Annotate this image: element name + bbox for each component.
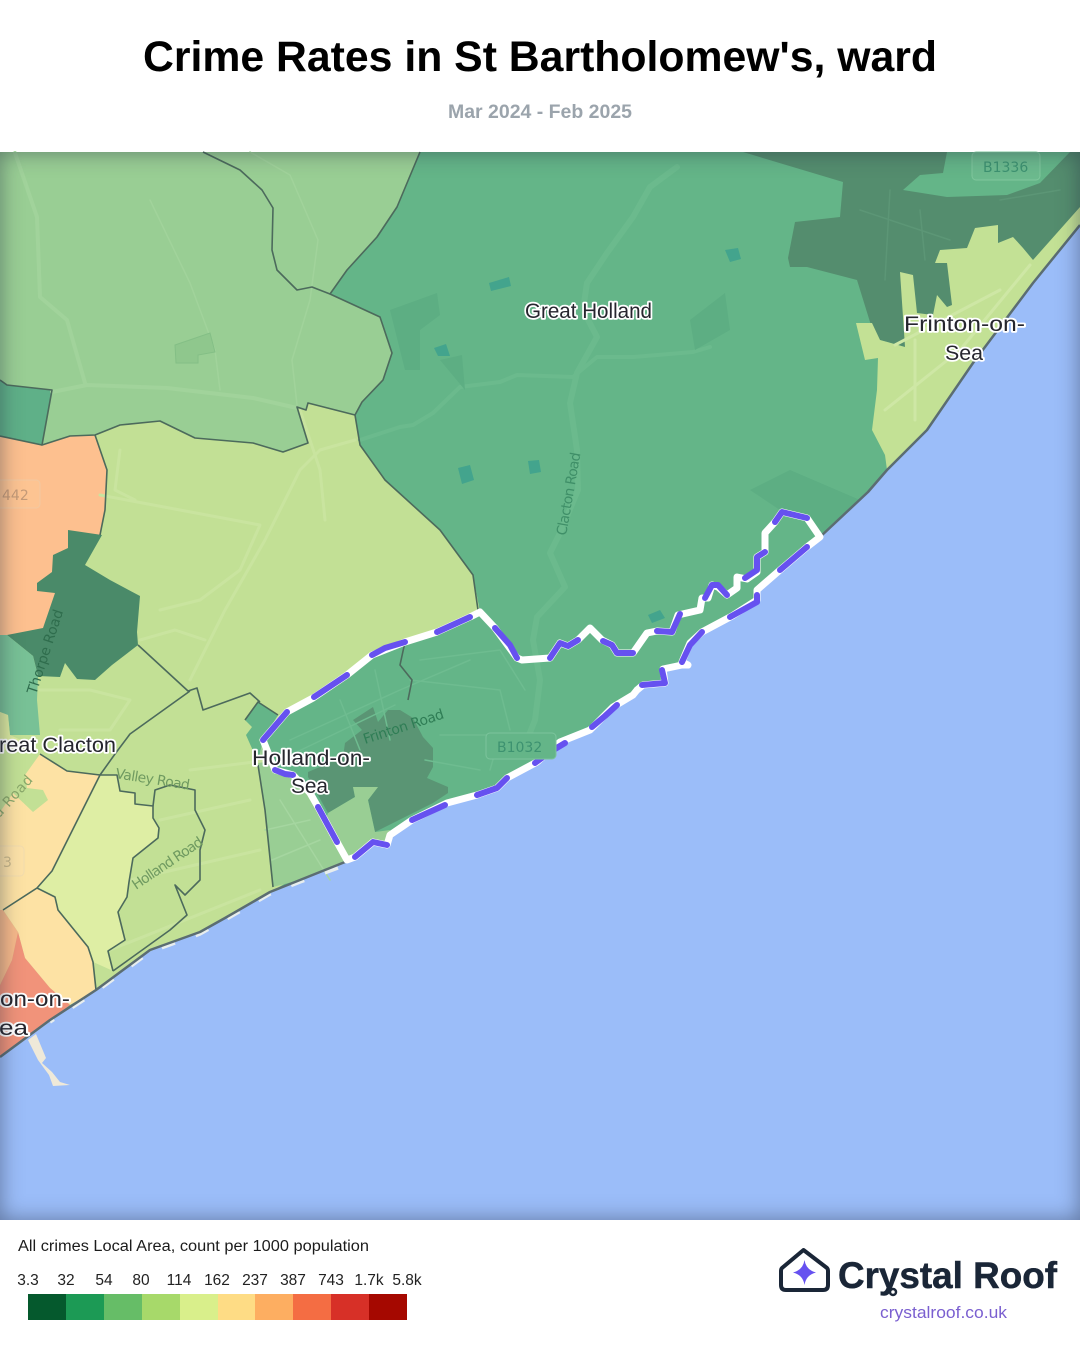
place label: Holland-on-Sea: Holland-on- xyxy=(252,747,370,770)
area: north-west light green xyxy=(0,152,420,452)
place label: Holland-on-Sea: Sea xyxy=(291,775,328,798)
icon: house with star xyxy=(781,1250,828,1290)
place label: Great Holland: Great Holland xyxy=(525,300,652,323)
wordmark knot xyxy=(890,1289,896,1295)
area: Frinton dark green xyxy=(743,152,1080,347)
area: pale yellow Clacton xyxy=(0,754,100,910)
road badge: 442 xyxy=(0,480,40,508)
legend tick labels: 162 xyxy=(204,1272,230,1289)
water bodies xyxy=(434,248,741,623)
area: pale yellow-green xyxy=(37,775,159,971)
paddock xyxy=(175,333,215,363)
pier xyxy=(28,1034,70,1086)
ward boundary: St Bartholomew's xyxy=(263,512,820,860)
road label: Holland Road: Holland Road xyxy=(129,834,206,893)
road badge: B1032 xyxy=(486,733,556,759)
legend tick labels: 114 xyxy=(167,1272,192,1289)
area: Holland light pocket xyxy=(325,787,390,862)
road badge: 442: 442 xyxy=(2,488,29,504)
area: central yellow-green xyxy=(0,403,480,1000)
area: Holland dark centre xyxy=(308,707,448,832)
coastline xyxy=(0,225,1080,1057)
area: west teal strip xyxy=(0,635,40,735)
place label: Frinton-on-Sea: Sea xyxy=(945,342,983,365)
ward outline white xyxy=(263,512,820,860)
area: Frinton light green xyxy=(856,207,1080,470)
place label: Holland-on-Sea xyxy=(252,747,370,798)
area: Holland west light green xyxy=(258,740,345,887)
area: Clacton orange xyxy=(0,435,107,635)
legend tick labels: 1.7k xyxy=(354,1272,384,1289)
website url: crystalroof.co.uk xyxy=(880,1304,1008,1322)
road: Clacton Road xyxy=(525,167,677,745)
area: pale yellow south xyxy=(3,888,96,1005)
road: Frinton streets xyxy=(885,265,1030,420)
legend title: All crimes Local Area, count per 1000 population xyxy=(18,1238,369,1255)
legend tick labels: 743 xyxy=(318,1272,344,1289)
legend tick labels: 80 xyxy=(132,1272,150,1289)
road: north-west lanes xyxy=(52,385,297,408)
legend tick labels xyxy=(17,1272,422,1289)
land: Great Holland base area xyxy=(0,152,1080,1057)
road: yellow-green streets xyxy=(40,410,355,950)
subtitle: date range: Mar 2024 - Feb 2025 xyxy=(448,101,632,123)
area: Clacton-on-Sea salmon xyxy=(0,932,70,1057)
road badge: B1336: B1336 xyxy=(983,160,1028,176)
legend tick labels: 5.8k xyxy=(392,1272,422,1289)
road: Holland west streets xyxy=(265,800,330,880)
legend tick labels: 54 xyxy=(95,1272,113,1289)
area: Holland small teal xyxy=(245,702,278,762)
area: pale patch at west edge xyxy=(0,712,25,752)
wordmark: Crystal Roof xyxy=(838,1255,1058,1296)
farmland and woods xyxy=(390,293,860,537)
area: west teal block xyxy=(0,380,52,445)
legend tick labels: 32 xyxy=(57,1272,75,1289)
road label: Frinton Road: Frinton Road xyxy=(361,707,446,748)
road label: Clacton Road: Clacton Road xyxy=(554,451,585,537)
boundaries xyxy=(0,152,478,990)
road: Great Holland east-west xyxy=(360,347,710,440)
ward outline purple dashes xyxy=(263,512,807,857)
road label: Thorpe Road: Thorpe Road xyxy=(24,608,67,697)
map edge vignette xyxy=(0,152,1080,1220)
road badge: partial: 3 xyxy=(3,855,12,871)
road label: Valley Road: Valley Road xyxy=(114,766,191,794)
road: ward streets xyxy=(280,650,525,770)
legend tick labels: 387 xyxy=(280,1272,306,1289)
legend colour scale xyxy=(28,1294,407,1320)
legend tick labels: 3.3 xyxy=(17,1272,39,1289)
roads xyxy=(15,152,1060,950)
area: orange sliver xyxy=(0,910,18,985)
legend xyxy=(17,1238,422,1320)
place label: Great Clacton: reat Clacton xyxy=(0,734,116,757)
place label: Frinton-on-Sea xyxy=(904,313,1025,365)
title: Crime Rates in St Bartholomew's, ward xyxy=(143,33,937,81)
road badge: B1336 xyxy=(972,152,1040,180)
road badge: B1032: B1032 xyxy=(497,740,542,756)
area: south-east strip green xyxy=(93,875,300,990)
logo: Crystal Roof xyxy=(781,1250,1058,1322)
legend tick labels: 237 xyxy=(242,1272,268,1289)
place label: Clacton-on-Sea: on-on- xyxy=(0,988,70,1011)
sea xyxy=(0,152,1080,1220)
choropleth map xyxy=(0,152,1080,1220)
place label: Frinton-on-Sea: Frinton-on- xyxy=(904,313,1025,336)
place label: Clacton-on-Sea xyxy=(0,988,70,1040)
area: Thorpe Road dark green xyxy=(7,530,140,680)
road badge: partial xyxy=(0,846,24,876)
